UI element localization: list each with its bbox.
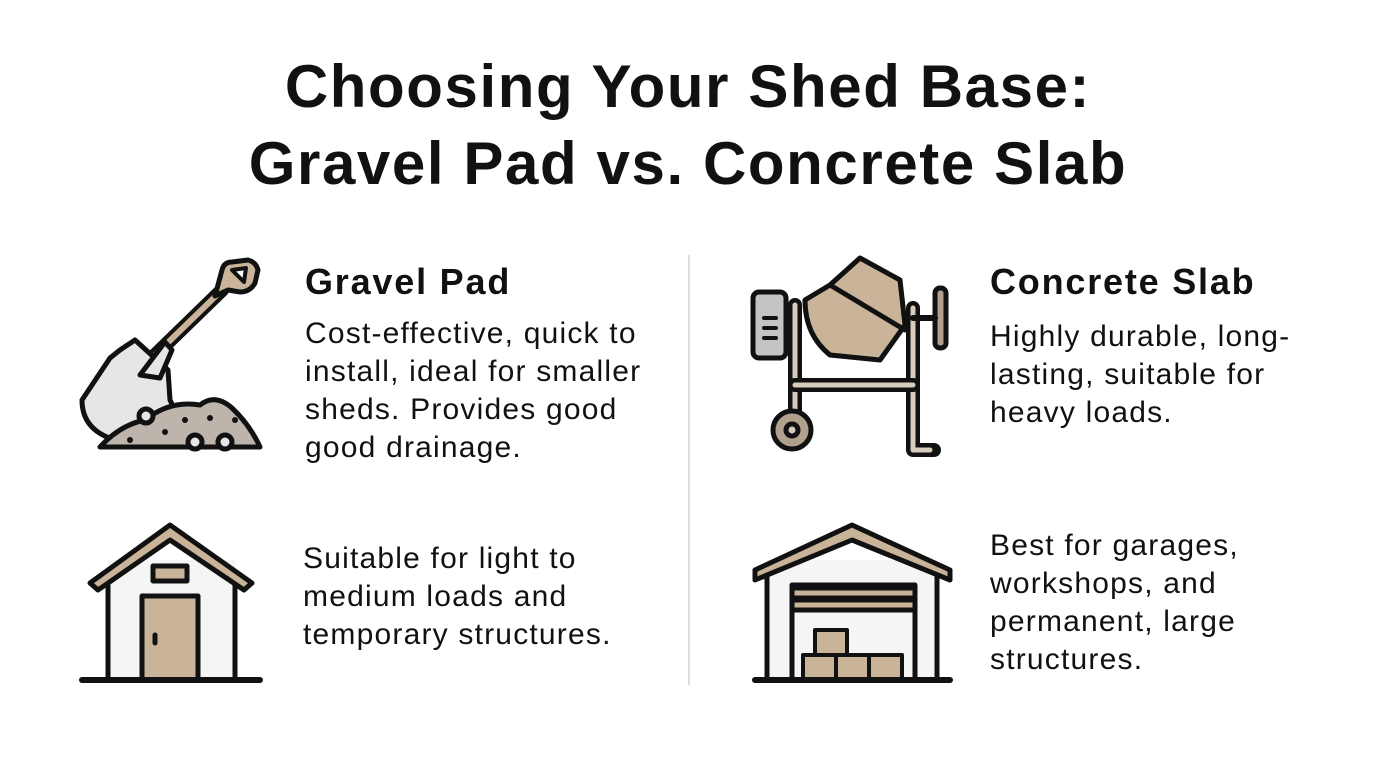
text: gravel pad benefits: good drainage. xyxy=(305,431,522,464)
text: gravel loads: temporary structures. xyxy=(303,618,612,651)
text: concrete uses: structures. xyxy=(990,643,1143,676)
text: gravel loads: Suitable for light to xyxy=(303,542,577,575)
title: Gravel Pad vs. Concrete Slab xyxy=(249,130,1127,197)
text: concrete benefits xyxy=(990,320,1290,429)
text: gravel loads: medium loads and xyxy=(303,580,567,613)
text: concrete benefits: Highly durable, long- xyxy=(990,320,1290,353)
icon: cement mixer xyxy=(753,258,946,450)
text: concrete uses xyxy=(990,529,1239,676)
text: concrete uses: Best for garages, xyxy=(990,529,1239,562)
text: concrete benefits: heavy loads. xyxy=(990,396,1173,429)
heading: concrete slab: Concrete Slab xyxy=(990,261,1255,302)
icon: garage xyxy=(755,525,950,680)
text: gravel pad benefits: install, ideal for smaller xyxy=(305,355,641,388)
text: concrete uses: permanent, large xyxy=(990,605,1236,638)
heading: gravel pad: Gravel Pad xyxy=(305,261,511,302)
title xyxy=(249,53,1127,197)
text: gravel pad benefits: sheds. Provides good xyxy=(305,393,618,426)
icon: shovel xyxy=(82,260,260,449)
text: concrete uses: workshops, and xyxy=(990,567,1217,600)
divider xyxy=(688,255,690,685)
text: gravel pad benefits xyxy=(305,317,641,464)
text: gravel loads xyxy=(303,542,612,651)
text: concrete benefits: lasting, suitable for xyxy=(990,358,1265,391)
title: Choosing Your Shed Base: xyxy=(285,53,1091,120)
text: gravel pad benefits: Cost-effective, quick to xyxy=(305,317,637,350)
icon: shed xyxy=(82,525,260,680)
